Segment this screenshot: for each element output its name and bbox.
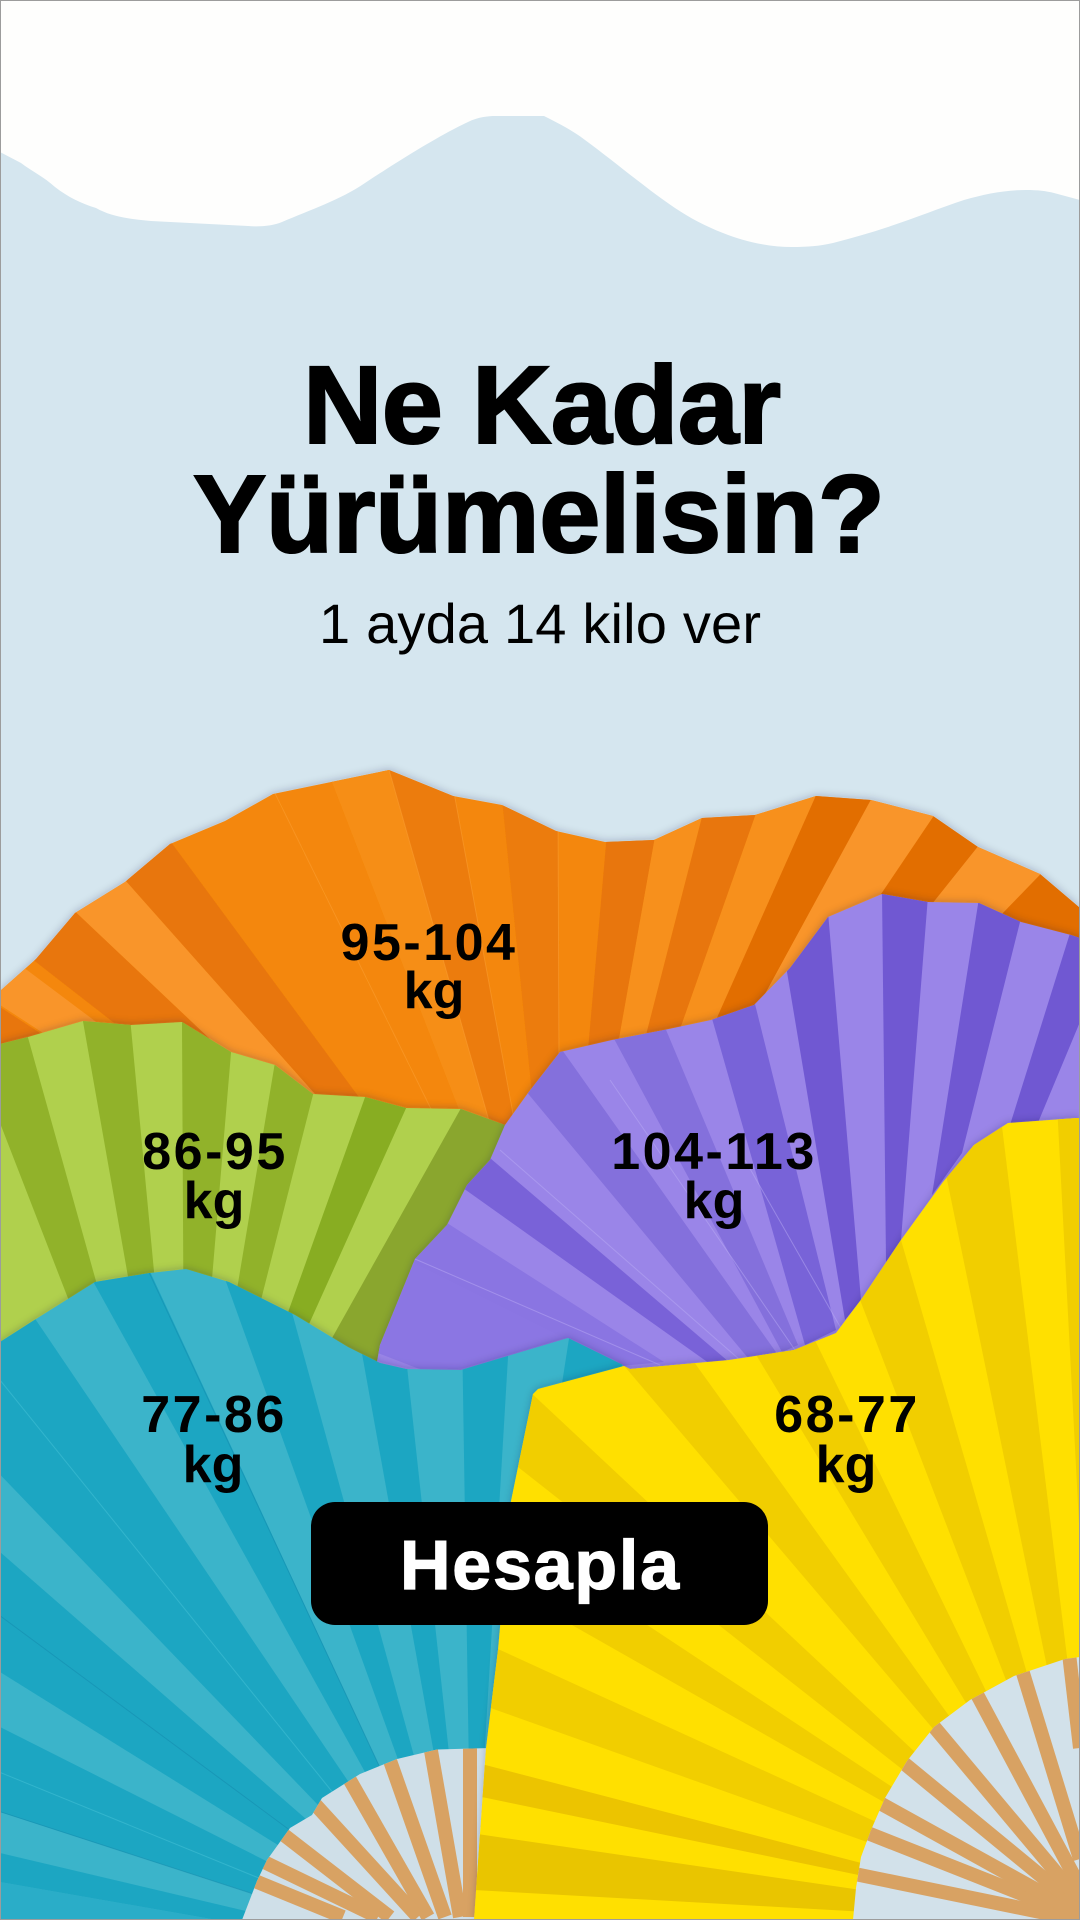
label: 77-86 kg	[141, 1386, 287, 1494]
label: 77-86 kg: kg	[183, 1436, 243, 1494]
label: 95-104 kg	[341, 914, 517, 1020]
button: Hesapla	[311, 1502, 768, 1625]
background: pale blue hills	[0, 116, 1080, 1200]
fan: purple	[374, 890, 1079, 1370]
teal fan wooden spokes	[250, 1745, 470, 1917]
label: 86-95 kg	[142, 1123, 288, 1230]
label: 68-77 kg	[774, 1386, 920, 1494]
teal fan hole	[242, 1748, 490, 1920]
fan: orange	[1, 766, 1079, 1125]
label: 95-104 kg: kg	[404, 962, 464, 1020]
label: 104-113 kg	[611, 1123, 817, 1230]
fan: green	[1, 1016, 506, 1362]
label: 68-77 kg: kg	[816, 1436, 876, 1494]
yellow fan wooden spokes	[850, 1645, 1080, 1920]
label: 68-77 kg: 68-77	[774, 1386, 920, 1444]
label: 86-95 kg: 86-95	[142, 1123, 288, 1181]
fan: teal	[1, 1265, 626, 1919]
label: 77-86 kg: 77-86	[141, 1386, 287, 1444]
label: 86-95 kg: kg	[184, 1172, 244, 1230]
label: 104-113 kg: 104-113	[611, 1123, 817, 1181]
title: Ne Kadar	[303, 344, 781, 467]
button: Hesapla: Hesapla	[400, 1526, 680, 1604]
title: Yürümelisin?	[193, 453, 885, 576]
fan: yellow	[471, 1114, 1079, 1919]
label: 104-113 kg: kg	[684, 1172, 744, 1230]
title	[193, 344, 885, 576]
yellow fan hole	[853, 1657, 1080, 1920]
label: 95-104 kg: 95-104	[341, 914, 517, 972]
subtitle: 1 ayda 14 kilo ver	[319, 592, 761, 655]
